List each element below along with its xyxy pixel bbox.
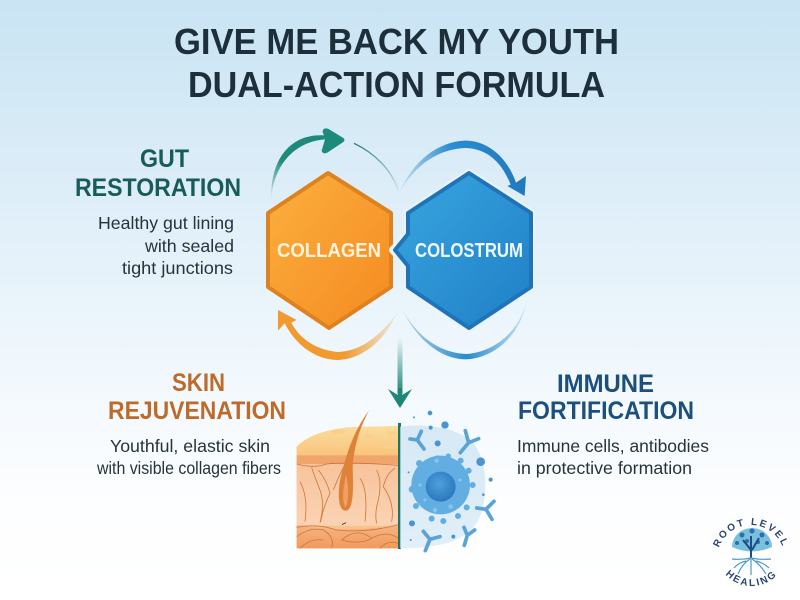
label: colostrum: COLOSTRUM (415, 239, 523, 262)
heading: immune fortification (518, 370, 694, 425)
arrow: teal curved arrow (271, 128, 344, 199)
text: gut restoration description: tight junctions (122, 258, 233, 278)
heading: immune fortification: IMMUNE (557, 370, 654, 398)
hexagon: collagen (268, 173, 391, 328)
arrow: blue lower curve (402, 301, 527, 359)
text: gut restoration description: with sealed (144, 236, 234, 256)
text: gut restoration description (98, 213, 234, 278)
illustration: divider (398, 423, 401, 549)
logo: root level healing (712, 518, 787, 586)
title: GIVE ME BACK MY YOUTH (174, 21, 619, 62)
illustration: skin cross-section (297, 410, 398, 548)
panel: immune fortification (517, 370, 709, 478)
panel: skin rejuvenation (96, 369, 286, 478)
arrow: blue curved arrow (400, 141, 526, 196)
heading: skin rejuvenation: REJUVENATION (108, 397, 286, 425)
arrow: thin teal curve (354, 143, 398, 191)
title: DUAL-ACTION FORMULA (188, 64, 605, 105)
hexagon: colostrum (393, 173, 531, 328)
text: immune fortification description: Immune cells, antibodies (517, 436, 709, 456)
panel: gut restoration (75, 145, 241, 278)
heading: skin rejuvenation: SKIN (172, 369, 225, 397)
heading: gut restoration: GUT (140, 145, 189, 173)
text: gut restoration description: Healthy gut lining (98, 213, 234, 233)
text: skin rejuvenation description: with visible collagen fibers (96, 458, 281, 478)
text: skin rejuvenation description: Youthful, elastic skin (110, 436, 270, 456)
arrow: orange curved arrow (278, 310, 397, 360)
logo wordmark (712, 518, 787, 586)
heading: gut restoration (75, 145, 241, 202)
illustration: immune cell with antibodies (400, 411, 494, 551)
heading: gut restoration: RESTORATION (75, 174, 241, 202)
text: immune fortification description (517, 436, 709, 478)
logo tree (732, 528, 772, 575)
label: collagen: COLLAGEN (277, 239, 381, 262)
text: skin rejuvenation description (96, 436, 281, 478)
heading: immune fortification: FORTIFICATION (518, 397, 694, 425)
logo wordmark: HEALING (726, 570, 776, 586)
text: immune fortification description: in protective formation (517, 458, 692, 478)
arrow: down to skin and immune illustration (388, 338, 412, 408)
title (174, 21, 619, 105)
heading: skin rejuvenation (108, 369, 286, 425)
logo wordmark: ROOT LEVEL (712, 518, 787, 548)
